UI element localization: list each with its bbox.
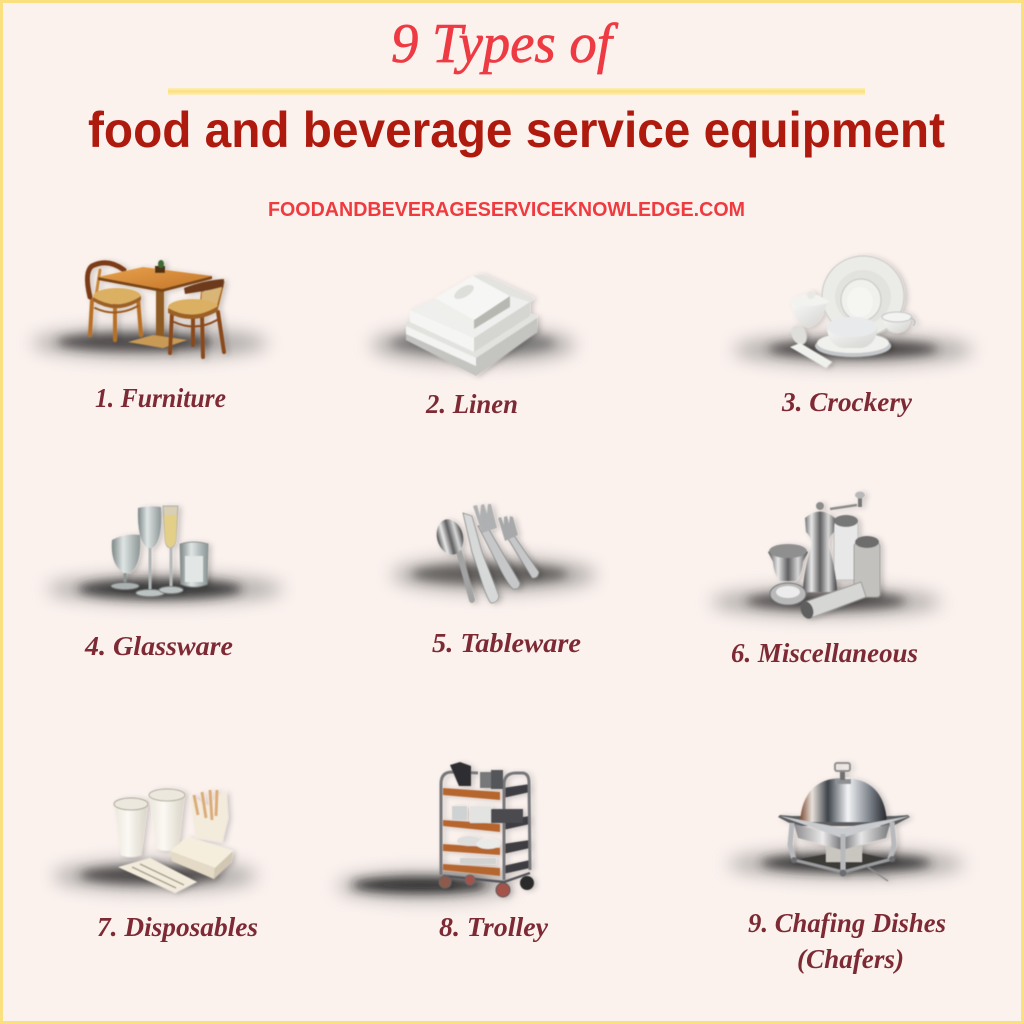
- icon: pepper mill, shakers and bowls: [768, 492, 880, 621]
- panel: chafing dishes: [728, 763, 964, 974]
- panel: linen: [371, 274, 575, 419]
- label: 1. Furniture: [95, 383, 226, 413]
- icon: disposable cups and containers: [114, 789, 233, 893]
- website url: FOODANDBEVERAGESERVICEKNOWLEDGE.COM: [268, 199, 745, 221]
- floor shadow: [371, 327, 575, 363]
- floor shadow: [733, 335, 973, 365]
- panel: crockery: [733, 256, 973, 417]
- panel: furniture: [32, 260, 268, 413]
- label: 8. Trolley: [439, 912, 549, 942]
- label: 6. Miscellaneous: [731, 638, 918, 668]
- label: 7. Disposables: [97, 912, 258, 942]
- floor shadow: [392, 558, 596, 592]
- panel: tableware: [392, 504, 596, 658]
- floor shadow: [728, 850, 964, 878]
- panel: trolley: [337, 762, 549, 942]
- floor shadow: [711, 588, 941, 616]
- icon: table and chairs: [87, 260, 224, 357]
- title: 9 Types of: 9 Types of: [391, 13, 619, 75]
- icon: chafing dish: [778, 763, 910, 881]
- label: 2. Linen: [425, 389, 518, 419]
- label: 3. Crockery: [781, 387, 913, 417]
- icon: stack of folded linen: [406, 274, 537, 376]
- label: (Chafers): [797, 944, 904, 974]
- divider under title: [168, 88, 865, 95]
- label: 5. Tableware: [432, 628, 581, 658]
- icon: service trolley: [439, 762, 534, 897]
- floor shadow: [337, 872, 513, 900]
- panel: glassware: [47, 506, 283, 661]
- panel: disposables: [53, 789, 258, 942]
- heading: food and beverage service equipment: food and beverage service equipment: [88, 102, 945, 158]
- floor shadow: [32, 328, 268, 358]
- icon: plates, bowls and cups: [788, 256, 915, 368]
- panel: miscellaneous: [711, 492, 941, 668]
- icon: spoon, knife and forks: [433, 504, 539, 603]
- label: [748, 908, 946, 974]
- label: 4. Glassware: [84, 631, 233, 661]
- icon: drinking glasses: [111, 506, 208, 596]
- floor shadow: [53, 861, 257, 891]
- label: 9. Chafing Dishes: [748, 908, 946, 938]
- floor shadow: [47, 575, 283, 603]
